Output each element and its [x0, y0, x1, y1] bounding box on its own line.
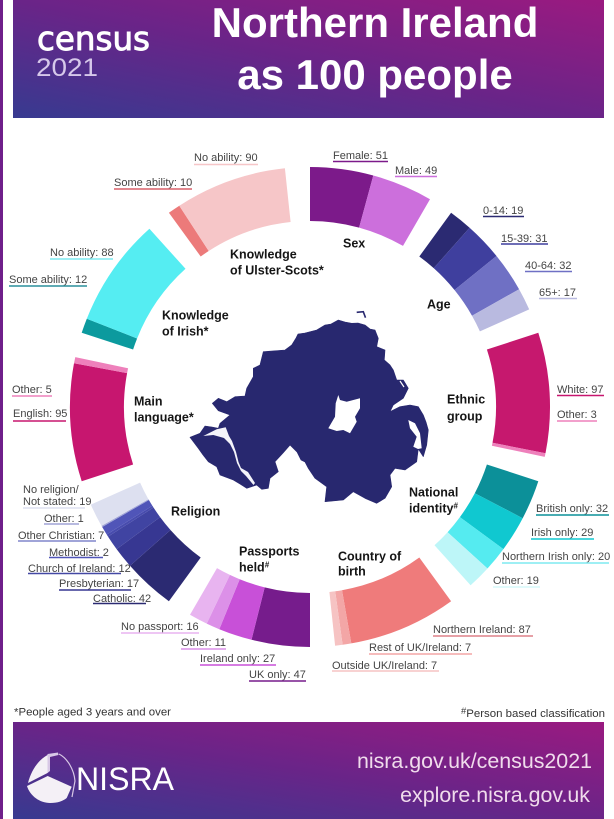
label: Ireland only 27: Ireland only: 27 [200, 653, 275, 665]
website links: nisra.gov.uk/census2021 [357, 749, 592, 773]
segment: ethnic group [487, 333, 550, 457]
label: Catholic 42: Catholic: 42 [93, 593, 151, 605]
heading: Main language: language* [134, 410, 194, 424]
census 2021 logo: census [37, 19, 150, 58]
heading: Passports held: # [265, 560, 270, 570]
label: No religion / Not stated 19: Not stated: 19 [23, 496, 92, 508]
website links [357, 749, 592, 807]
map of Northern Ireland [190, 312, 428, 503]
label: Other 19: Other: 19 [493, 575, 539, 587]
label: Other 5: Other: 5 [12, 384, 52, 396]
heading: Knowledge of Irish: Knowledge [162, 308, 229, 322]
label: Female 51: Female: 51 [333, 150, 388, 162]
label: 65+ 17: 65+: 17 [539, 287, 576, 299]
heading: National identity: # [453, 502, 458, 510]
Strangford Lough [408, 420, 422, 449]
label: 0-14 19: 0-14: 19 [483, 205, 523, 217]
label: Other 3: Other: 3 [557, 409, 597, 421]
label: Irish only 29: Irish only: 29 [531, 527, 593, 539]
label: Church of Ireland 12: Church of Ireland: 12 [28, 563, 131, 575]
label: UK only 47: UK only: 47 [249, 669, 306, 681]
NISRA logo [27, 752, 175, 803]
label: No ability 88: No ability: 88 [50, 247, 114, 259]
heading: Passports held: held [239, 560, 265, 574]
ring chart [70, 167, 550, 647]
heading: Knowledge of Irish: of Irish* [162, 324, 209, 338]
heading: National identity: identity [409, 502, 453, 516]
label: 40-64 32: 40-64: 32 [525, 260, 571, 272]
label: Rest of UK/Ireland 7: Rest of UK/Ireland: 7 [369, 642, 471, 654]
label: No passport 16: No passport: 16 [121, 621, 199, 633]
footer banner [13, 722, 604, 819]
heading: Ethnic group: Ethnic [447, 392, 485, 406]
label: Other 11: Other: 11 [181, 637, 226, 649]
NISRA logo: NISRA [76, 761, 175, 797]
footnote: person based classification: Person based classification [466, 708, 605, 720]
label: 15-39 31: 15-39: 31 [501, 233, 547, 245]
label: No religion / Not stated 19: No religion/ [23, 484, 79, 496]
segment: religion [91, 483, 201, 601]
footnote: people aged 3 and over: *People aged 3 years and over [14, 706, 171, 718]
label: English 95: English: 95 [13, 408, 67, 420]
label: Other 1: Other: 1 [44, 513, 84, 525]
title: as 100 people [237, 51, 513, 98]
heading: Country of birth: birth [338, 564, 366, 578]
label: Northern Irish only 20: Northern Irish only: 20 [502, 551, 610, 563]
segment: country of birth [329, 558, 451, 646]
title [212, 0, 538, 98]
label: Male 49: Male: 49 [395, 165, 437, 177]
heading: Knowledge of Ulster-Scots: of Ulster-Scots* [230, 264, 324, 278]
label: Other Christian 7: Other Christian: 7 [18, 530, 104, 542]
heading: Age: Age [427, 298, 451, 312]
segment: knowledge of Ulster-Scots [169, 168, 291, 256]
heading: Knowledge of Ulster-Scots: Knowledge [230, 248, 297, 262]
heading: Ethnic group: group [447, 410, 483, 424]
segment: knowledge of Irish [82, 229, 186, 350]
heading: Religion: Religion [171, 504, 220, 518]
census 2021 logo [36, 19, 150, 82]
label: Outside UK/Ireland 7: Outside UK/Ireland: 7 [332, 660, 437, 672]
segment: sex [310, 167, 430, 246]
heading: Sex: Sex [343, 236, 365, 250]
label: Some ability 10: Some ability: 10 [114, 177, 192, 189]
label: Methodist 2: Methodist: 2 [49, 547, 109, 559]
website links: explore.nisra.gov.uk [400, 783, 590, 807]
segment: age [419, 213, 529, 331]
heading: Main language: Main [134, 394, 162, 408]
title: Northern Ireland [212, 0, 538, 46]
label: Some ability 12: Some ability: 12 [9, 274, 87, 286]
footnote: person based classification: # [461, 706, 466, 716]
Lough Neagh [328, 395, 360, 433]
label: Northern Ireland 87: Northern Ireland: 87 [433, 624, 531, 636]
heading: National identity: National [409, 486, 458, 500]
segment: national identity [434, 464, 538, 585]
label: British only 32: British only: 32 [536, 503, 608, 515]
label: Presbyterian 17: Presbyterian: 17 [59, 578, 139, 590]
label: No ability 90: No ability: 90 [194, 152, 258, 164]
Lough Erne [203, 427, 255, 485]
Larne Lough [400, 381, 404, 387]
heading: Country of birth: Country of [338, 550, 401, 564]
segment: main language [70, 357, 133, 481]
label: White 97: White: 97 [557, 384, 603, 396]
Rathlin Island [357, 312, 366, 318]
segment: passports held [190, 568, 310, 647]
heading: Passports held: Passports [239, 544, 299, 558]
census 2021 logo: 2021 [36, 54, 98, 82]
label: No religion / Not stated 19 [23, 484, 92, 508]
header banner [13, 0, 604, 118]
